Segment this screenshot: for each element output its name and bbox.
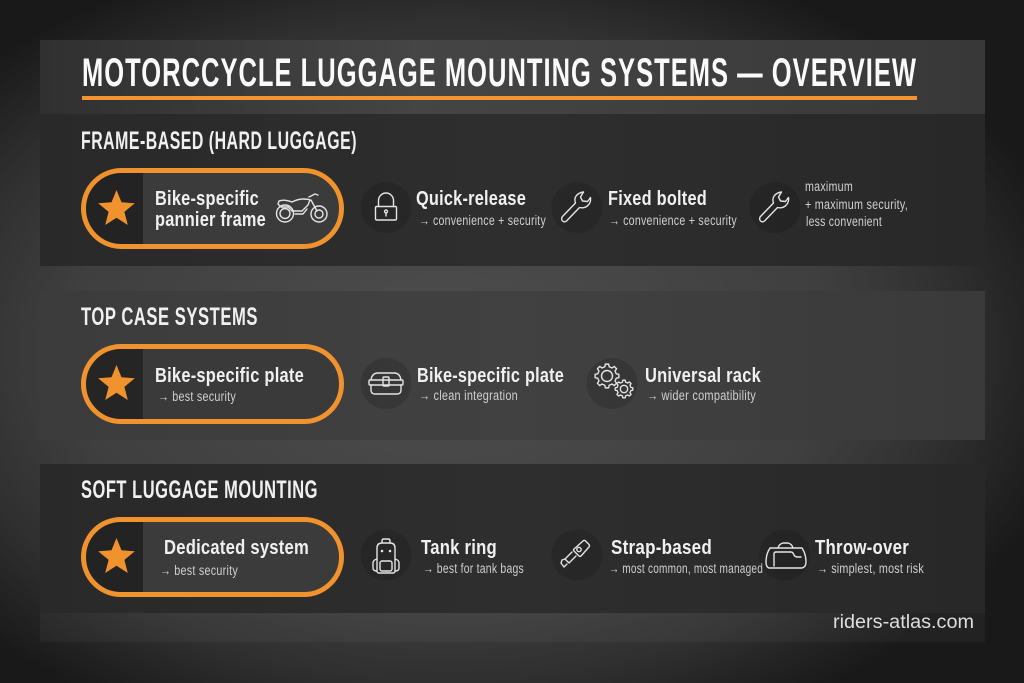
icon: wrench [750,182,800,233]
item: clean integration: Bike-specific plate [417,364,564,387]
item: maximum security: maximum [805,179,853,194]
item: quick-release: → convenience + security [419,213,546,228]
highlighted card: dedicated system [80,517,345,597]
icon: duffel bag [759,530,810,580]
item: quick-release: Quick-release [416,187,526,210]
item: fixed bolted: Fixed bolted [608,187,707,210]
item: maximum security: less convenient [806,214,882,229]
icon: gears [586,358,638,409]
panel: soft luggage mounting [40,464,985,613]
item: strap-based [552,530,763,580]
icon: padlock [360,182,412,233]
item: universal rack: Universal rack [645,364,761,387]
icon: top case [360,358,412,409]
item: tank ring: → best for tank bags [423,561,524,576]
item: quick-release [360,182,546,233]
icon: motorcycle [276,194,327,222]
text: bike-specific plate: → best security [158,389,236,404]
text: bike-specific pannier frame: pannier frame [155,208,266,231]
icon: backpack [360,530,412,580]
text: bike-specific plate: Bike-specific plate [155,364,304,387]
icon: strap buckle [552,530,602,580]
item: maximum security: + maximum security, [805,197,908,212]
item: tank ring: Tank ring [421,536,497,559]
heading: frame-based: FRAME-BASED (HARD LUGGAGE) [81,127,357,155]
panel: frame-based hard luggage [40,114,985,266]
icon: star [98,538,135,573]
text: bike-specific pannier frame: Bike-specific [155,187,259,210]
item: fixed bolted [552,182,737,233]
item: strap-based: → most common, most managed [609,561,763,576]
item: universal rack: → wider compatibility [647,388,756,403]
icon: wrench [552,182,602,233]
highlighted card: bike-specific pannier frame [80,168,345,248]
icon: star [98,365,135,400]
item: throw-over [759,530,924,580]
text: bike-specific plate [155,364,304,404]
item: fixed bolted: → convenience + security [609,213,737,228]
item: maximum security [750,179,908,233]
item: throw-over: Throw-over [815,536,909,559]
footer strip [40,613,985,642]
panel: top case systems [40,291,985,440]
heading: top case systems: TOP CASE SYSTEMS [81,303,258,331]
text: dedicated system: → best security [160,563,238,578]
highlighted card: bike-specific plate [80,344,345,424]
item: clean integration: → clean integration [419,388,518,403]
text: dedicated system [160,536,309,578]
item: universal rack [586,358,761,409]
heading: soft luggage mounting: SOFT LUGGAGE MOUNTING [81,476,318,504]
text: dedicated system: Dedicated system [164,536,309,559]
item: strap-based: Strap-based [611,536,712,559]
website credit: riders-atlas.com [833,612,974,633]
icon: star [98,190,135,225]
item: tank ring [360,530,524,580]
text: bike-specific pannier frame [155,187,266,231]
panel: header [40,40,985,114]
item: clean integration [360,358,564,409]
item: throw-over: → simplest, most risk [817,561,924,576]
